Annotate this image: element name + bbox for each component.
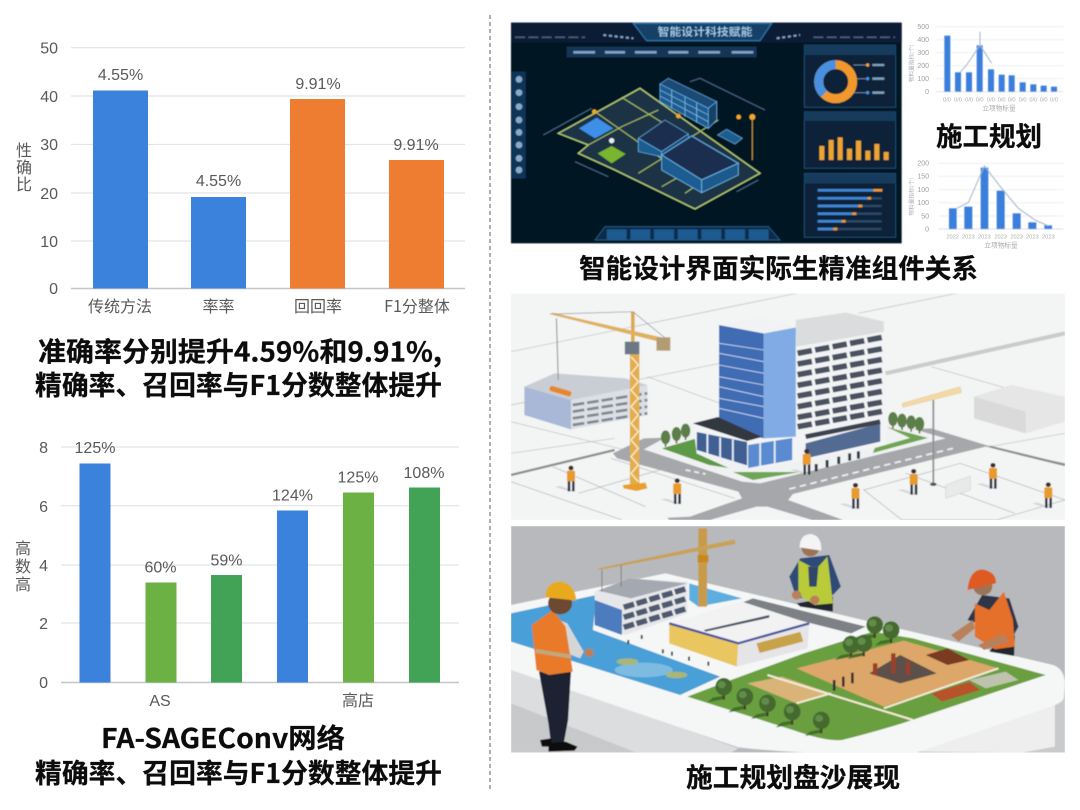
dashboard title: 智能设计科技赋能 xyxy=(657,23,752,39)
heading: network result: FA-SAGEConv网络 xyxy=(101,717,345,756)
model warehouse xyxy=(669,602,809,667)
bars: AS group: 60% xyxy=(144,560,177,576)
bars: AS group: 125% xyxy=(75,440,115,457)
chart: small top bar chart: 0/0 xyxy=(954,98,962,104)
chart: small top bar chart: 0/0 xyxy=(965,98,973,104)
progress panel xyxy=(804,173,896,237)
y axis ticks: 4 xyxy=(39,558,48,575)
panel: smart design dashboard xyxy=(511,23,902,243)
panel: network bar chart xyxy=(15,440,459,711)
chart: small bottom bar chart: 0 xyxy=(925,226,929,233)
chart: small top bar chart: 物料量指标(个) xyxy=(906,44,915,82)
chart: small bottom bar chart: 立项物标量 xyxy=(984,239,1018,249)
column panel xyxy=(804,112,896,168)
model tall building xyxy=(595,578,687,635)
heading: network result: 精确率、召回率与F1分数整体提升 xyxy=(35,752,442,791)
chart: small top bar chart: 500 xyxy=(917,24,929,31)
bar: rate: 率率 xyxy=(202,293,235,317)
road network xyxy=(613,428,991,520)
chart: small top bar chart: 0/0 xyxy=(976,98,984,104)
bars: high group xyxy=(272,465,444,711)
lawn xyxy=(687,632,1046,740)
chart: small top bar chart: 0/0 xyxy=(1008,98,1016,104)
bars: high group: 108% xyxy=(404,465,444,482)
chart: small bottom bar chart: 2023 xyxy=(978,235,991,241)
ground plots xyxy=(511,447,1065,520)
chart: small bottom bar chart: 2023 xyxy=(994,235,1007,241)
chart: small top bar chart: 0/0 xyxy=(987,98,995,104)
chart: small bottom bar chart: 150 xyxy=(917,174,929,181)
y axis title: 确 xyxy=(16,159,32,177)
chart: small bottom bar chart: 50 xyxy=(921,213,929,220)
y axis ticks xyxy=(40,40,58,298)
small building left xyxy=(570,385,648,430)
y axis ticks: 50 xyxy=(40,40,58,58)
plaza and lawns xyxy=(644,422,946,483)
bar: F1: 9.91% xyxy=(393,137,439,154)
y axis ticks: 10 xyxy=(40,234,58,251)
chart: small top bar chart: 0/0 xyxy=(1040,98,1048,104)
chart: small bottom bar chart: 2022 xyxy=(946,235,959,241)
y axis title xyxy=(16,142,32,194)
y axis title: 高 xyxy=(15,540,31,558)
water xyxy=(511,595,720,695)
chart: small bottom bar chart: 200 xyxy=(917,161,929,168)
worker: orange hat xyxy=(951,569,1018,656)
road xyxy=(740,598,866,633)
trees xyxy=(707,616,899,736)
main building xyxy=(693,313,887,471)
chart: small top bar chart xyxy=(906,24,1063,113)
worker: yellow hat xyxy=(532,582,594,752)
chart: small top bar chart: 0/0 xyxy=(998,98,1006,104)
panel: construction sand table xyxy=(511,526,1065,753)
chart: small top bar chart: 0/0 xyxy=(1050,98,1058,104)
chart: small top bar chart: 0/0 xyxy=(943,98,951,104)
bar: traditional method: 4.55% xyxy=(98,67,143,84)
bars: AS group: 59% xyxy=(210,552,243,570)
y axis ticks: 2 xyxy=(39,616,48,633)
chart: small top bar chart: 立项物标量 xyxy=(982,103,1016,113)
table top xyxy=(511,573,1065,753)
donut panel xyxy=(804,45,896,107)
chart: small bottom bar chart: 2023 xyxy=(1010,235,1023,241)
y axis ticks: 0 xyxy=(39,675,48,692)
y axis ticks xyxy=(39,440,48,692)
bar: traditional method: 传统方法 xyxy=(88,293,152,317)
bar: rate: 4.55% xyxy=(196,173,241,190)
bar: recall: 回回率 xyxy=(294,293,342,317)
bars: high group: 124% xyxy=(272,488,313,504)
chart: small bottom bar chart: 2023 xyxy=(1026,235,1039,241)
panel: accuracy bar chart xyxy=(16,40,465,317)
site equipment xyxy=(833,648,969,691)
y axis title: 性 xyxy=(16,142,32,160)
chart: small top bar chart: 300 xyxy=(917,50,929,57)
chart: small bottom bar chart: 2023 xyxy=(1042,235,1055,241)
model crane xyxy=(598,528,735,607)
table side xyxy=(511,667,738,753)
bar: F1 xyxy=(384,137,450,317)
workers xyxy=(555,449,1052,509)
bars: high group: 高店 xyxy=(342,687,374,711)
chart: small bottom bar chart: 2023 xyxy=(962,235,975,241)
isometric site plan xyxy=(543,78,765,209)
chart: small top bar chart: 100 xyxy=(917,76,929,83)
chart: small top bar chart: 0/0 xyxy=(1029,98,1037,104)
plaza people xyxy=(627,635,709,666)
bars: high group: 125% xyxy=(338,470,378,486)
second crane and box xyxy=(902,385,1065,498)
bars: AS group: AS xyxy=(149,693,171,710)
bar: rate xyxy=(191,173,246,317)
bar: F1: F1分整体 xyxy=(384,293,450,317)
heading: accuracy result: 准确率分别提升4.59%和9.91%, xyxy=(38,330,442,370)
y axis ticks: 6 xyxy=(39,499,48,516)
bar: recall: 9.91% xyxy=(295,76,341,93)
bar: recall xyxy=(290,76,345,317)
tower crane xyxy=(549,312,670,491)
y axis title: 数 xyxy=(15,558,31,576)
sand xyxy=(797,641,998,707)
chart: small top bar chart: 400 xyxy=(917,37,929,44)
bars: AS group xyxy=(75,440,243,710)
chart: small bottom bar chart xyxy=(906,161,1063,249)
y axis ticks: 40 xyxy=(40,89,58,106)
chart: small top bar chart: 200 xyxy=(917,63,929,70)
heading: accuracy result: 精确率、召回率与F1分数整体提升 xyxy=(35,364,442,403)
y axis ticks: 30 xyxy=(40,137,58,154)
label: construction planning: 施工规划 xyxy=(936,115,1042,154)
y axis ticks: 8 xyxy=(39,440,48,457)
chart: small top bar chart: 0/0 xyxy=(1019,98,1027,104)
heading: network result xyxy=(35,717,442,791)
caption: sand table: 施工规划盘沙展现 xyxy=(686,756,900,795)
y axis title: 高 xyxy=(15,576,31,594)
y axis ticks: 0 xyxy=(49,281,58,298)
chart: small bottom bar chart: 物料量指标(个) xyxy=(906,178,915,216)
heading: accuracy result xyxy=(35,330,442,403)
caption: dashboard: 智能设计界面实际生精准组件关系 xyxy=(579,247,978,286)
chart: small top bar chart: 0 xyxy=(925,89,929,96)
panel: isometric building scene xyxy=(511,293,1065,520)
y axis title: 比 xyxy=(16,176,32,194)
chart: small bottom bar chart: 100 xyxy=(917,187,929,194)
y axis ticks: 20 xyxy=(40,186,58,203)
worker: white hat xyxy=(789,534,841,612)
bar: traditional method xyxy=(88,67,152,317)
chart: small bottom bar chart: 100 xyxy=(917,200,929,207)
y axis title xyxy=(15,540,31,594)
